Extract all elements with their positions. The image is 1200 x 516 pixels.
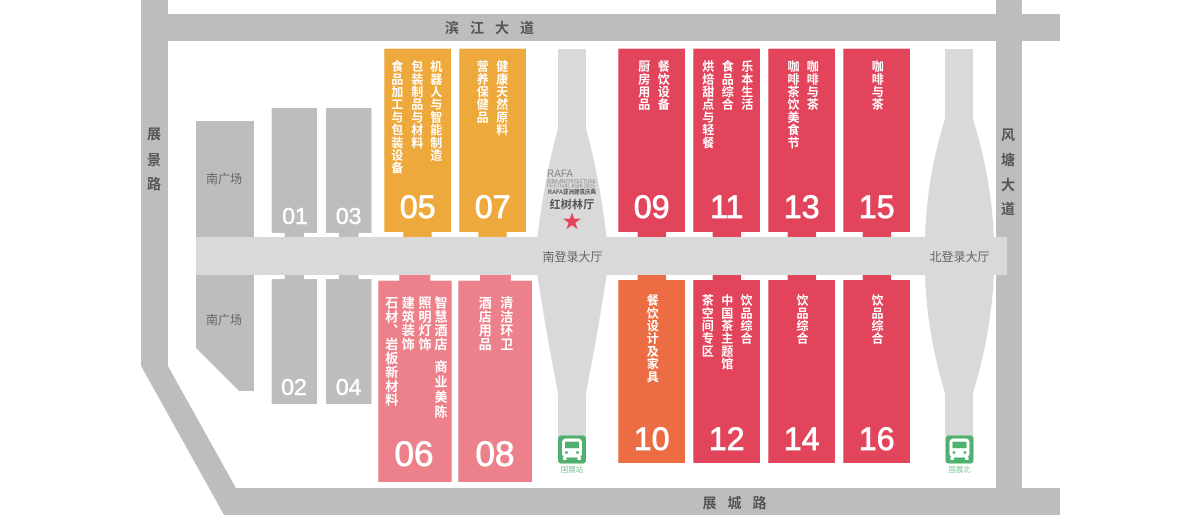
hall 06: 商业美陈: [432, 359, 448, 420]
hall 05: 机器人与智能制造: [429, 59, 443, 162]
hall 08: [458, 275, 532, 482]
hall 05: 包装制品与材料: [410, 59, 424, 149]
RAFA logo block: FESTIVAL ASIA 2025: [547, 184, 595, 190]
road label: 风塘大道: 塘: [1001, 152, 1015, 168]
hall 11: 食品综合: [720, 59, 734, 111]
south plaza lower: 南广场: [206, 312, 242, 327]
hall 06: 建筑装饰: [400, 295, 415, 352]
RAFA logo block: RAFA: [547, 168, 574, 180]
hall 12: [693, 275, 760, 463]
hall 05: 食品加工与包装设备: [390, 59, 404, 174]
hall 13: [768, 49, 835, 237]
hall 10: 10: [634, 421, 669, 457]
icon: star: [563, 212, 581, 229]
icon: bus station 国展站: 国展站: [561, 464, 584, 474]
hall 09: 厨房用品: [637, 60, 651, 111]
hall 10: 餐饮设计及家具: [645, 293, 659, 383]
hall 16: 饮品综合: [870, 293, 884, 345]
hall 11: 烘焙甜点与轻餐: [701, 60, 715, 149]
hall 15: [843, 49, 910, 237]
hall 12: 饮品综合: [739, 293, 753, 345]
hall 14: 饮品综合: [795, 293, 809, 345]
hall 13: 13: [784, 189, 819, 225]
hall 04: 04: [336, 374, 362, 400]
road label: 风塘大道: 道: [1001, 201, 1015, 217]
road label: 展景路: 展: [147, 126, 161, 142]
road label: 滨江大道: 滨江大道: [445, 20, 545, 36]
south plaza lower: [196, 275, 254, 391]
hall 06: 智慧酒店: [432, 295, 448, 352]
hall 12: 茶空间专区: [700, 293, 714, 358]
hall 09: 餐饮设备: [656, 59, 670, 111]
hall 13: 咖啡与茶: [805, 60, 819, 111]
road label: 风塘大道: 风: [1001, 127, 1015, 143]
hall 07: 07: [475, 189, 510, 225]
hall 05: 05: [400, 189, 435, 225]
hall 10: [618, 275, 685, 463]
hall 11: [693, 49, 760, 237]
label: 南登录大厅: 南登录大厅: [542, 249, 603, 264]
hall 07: 营养保健品: [475, 59, 489, 124]
RAFA logo block: RAFA亚洲建筑庆典: [548, 188, 596, 196]
hall 12: 中国茶主题馆: [720, 293, 734, 370]
hall 09: 09: [634, 189, 669, 225]
hall 11: 乐本生活: [740, 59, 754, 111]
hall 02: 02: [281, 374, 307, 400]
road label: 展景路: 路: [147, 176, 161, 192]
hall 01: 01: [282, 203, 308, 229]
hall 16: [843, 275, 910, 463]
label: 北登录大厅: 北登录大厅: [929, 249, 990, 264]
main hall band: [196, 237, 1007, 275]
road label: 风塘大道: [1001, 127, 1015, 217]
hall 01: [272, 108, 317, 238]
hall 14: 14: [784, 421, 819, 457]
hall 06: 06: [395, 435, 433, 474]
hall 03: [326, 108, 372, 238]
north concourse: [925, 49, 994, 436]
hall 07: [459, 49, 526, 237]
hall 16: 16: [859, 421, 894, 457]
south concourse: [537, 49, 607, 436]
label: 红树林厅: 红树林厅: [550, 197, 594, 211]
road label: 展景路: 景: [147, 152, 161, 168]
hall 15: 咖啡与茶: [870, 60, 884, 111]
hall 04: [326, 274, 372, 404]
hall 08: 08: [476, 435, 514, 474]
hall 08: 酒店用品: [477, 296, 492, 352]
road label: 展城路: 展城路: [702, 495, 778, 511]
road label: 风塘大道: 大: [1001, 177, 1015, 193]
south plaza upper: 南广场: [206, 171, 242, 186]
hall 13: 咖啡茶饮美食节: [786, 60, 800, 149]
hall 02: [272, 274, 317, 404]
hall 06: 照明灯饰: [416, 296, 432, 352]
RAFA logo block: RIBA ARCHITECTURE: [547, 179, 597, 185]
south plaza upper: [196, 121, 254, 237]
hall 07: 健康天然原料: [495, 59, 509, 136]
icon: bus station 国展站: [558, 436, 586, 474]
hall 03: 03: [336, 203, 361, 229]
hall 05: [384, 49, 451, 237]
hall 06: [378, 275, 452, 482]
hall 15: 15: [859, 189, 894, 225]
icon: bus station 国展北: [946, 436, 974, 474]
road label: 展景路: [147, 126, 161, 192]
RAFA logo block: [547, 168, 597, 196]
hall 09: [618, 49, 685, 237]
hall 08: 清洁环卫: [498, 295, 513, 352]
icon: bus station 国展北: 国展北: [948, 465, 971, 474]
hall 11: 11: [710, 189, 743, 225]
road network: [141, 0, 1060, 515]
hall 14: [768, 275, 835, 463]
hall 12: 12: [709, 421, 744, 457]
hall 06: 石材、岩板新材料: [383, 296, 398, 408]
